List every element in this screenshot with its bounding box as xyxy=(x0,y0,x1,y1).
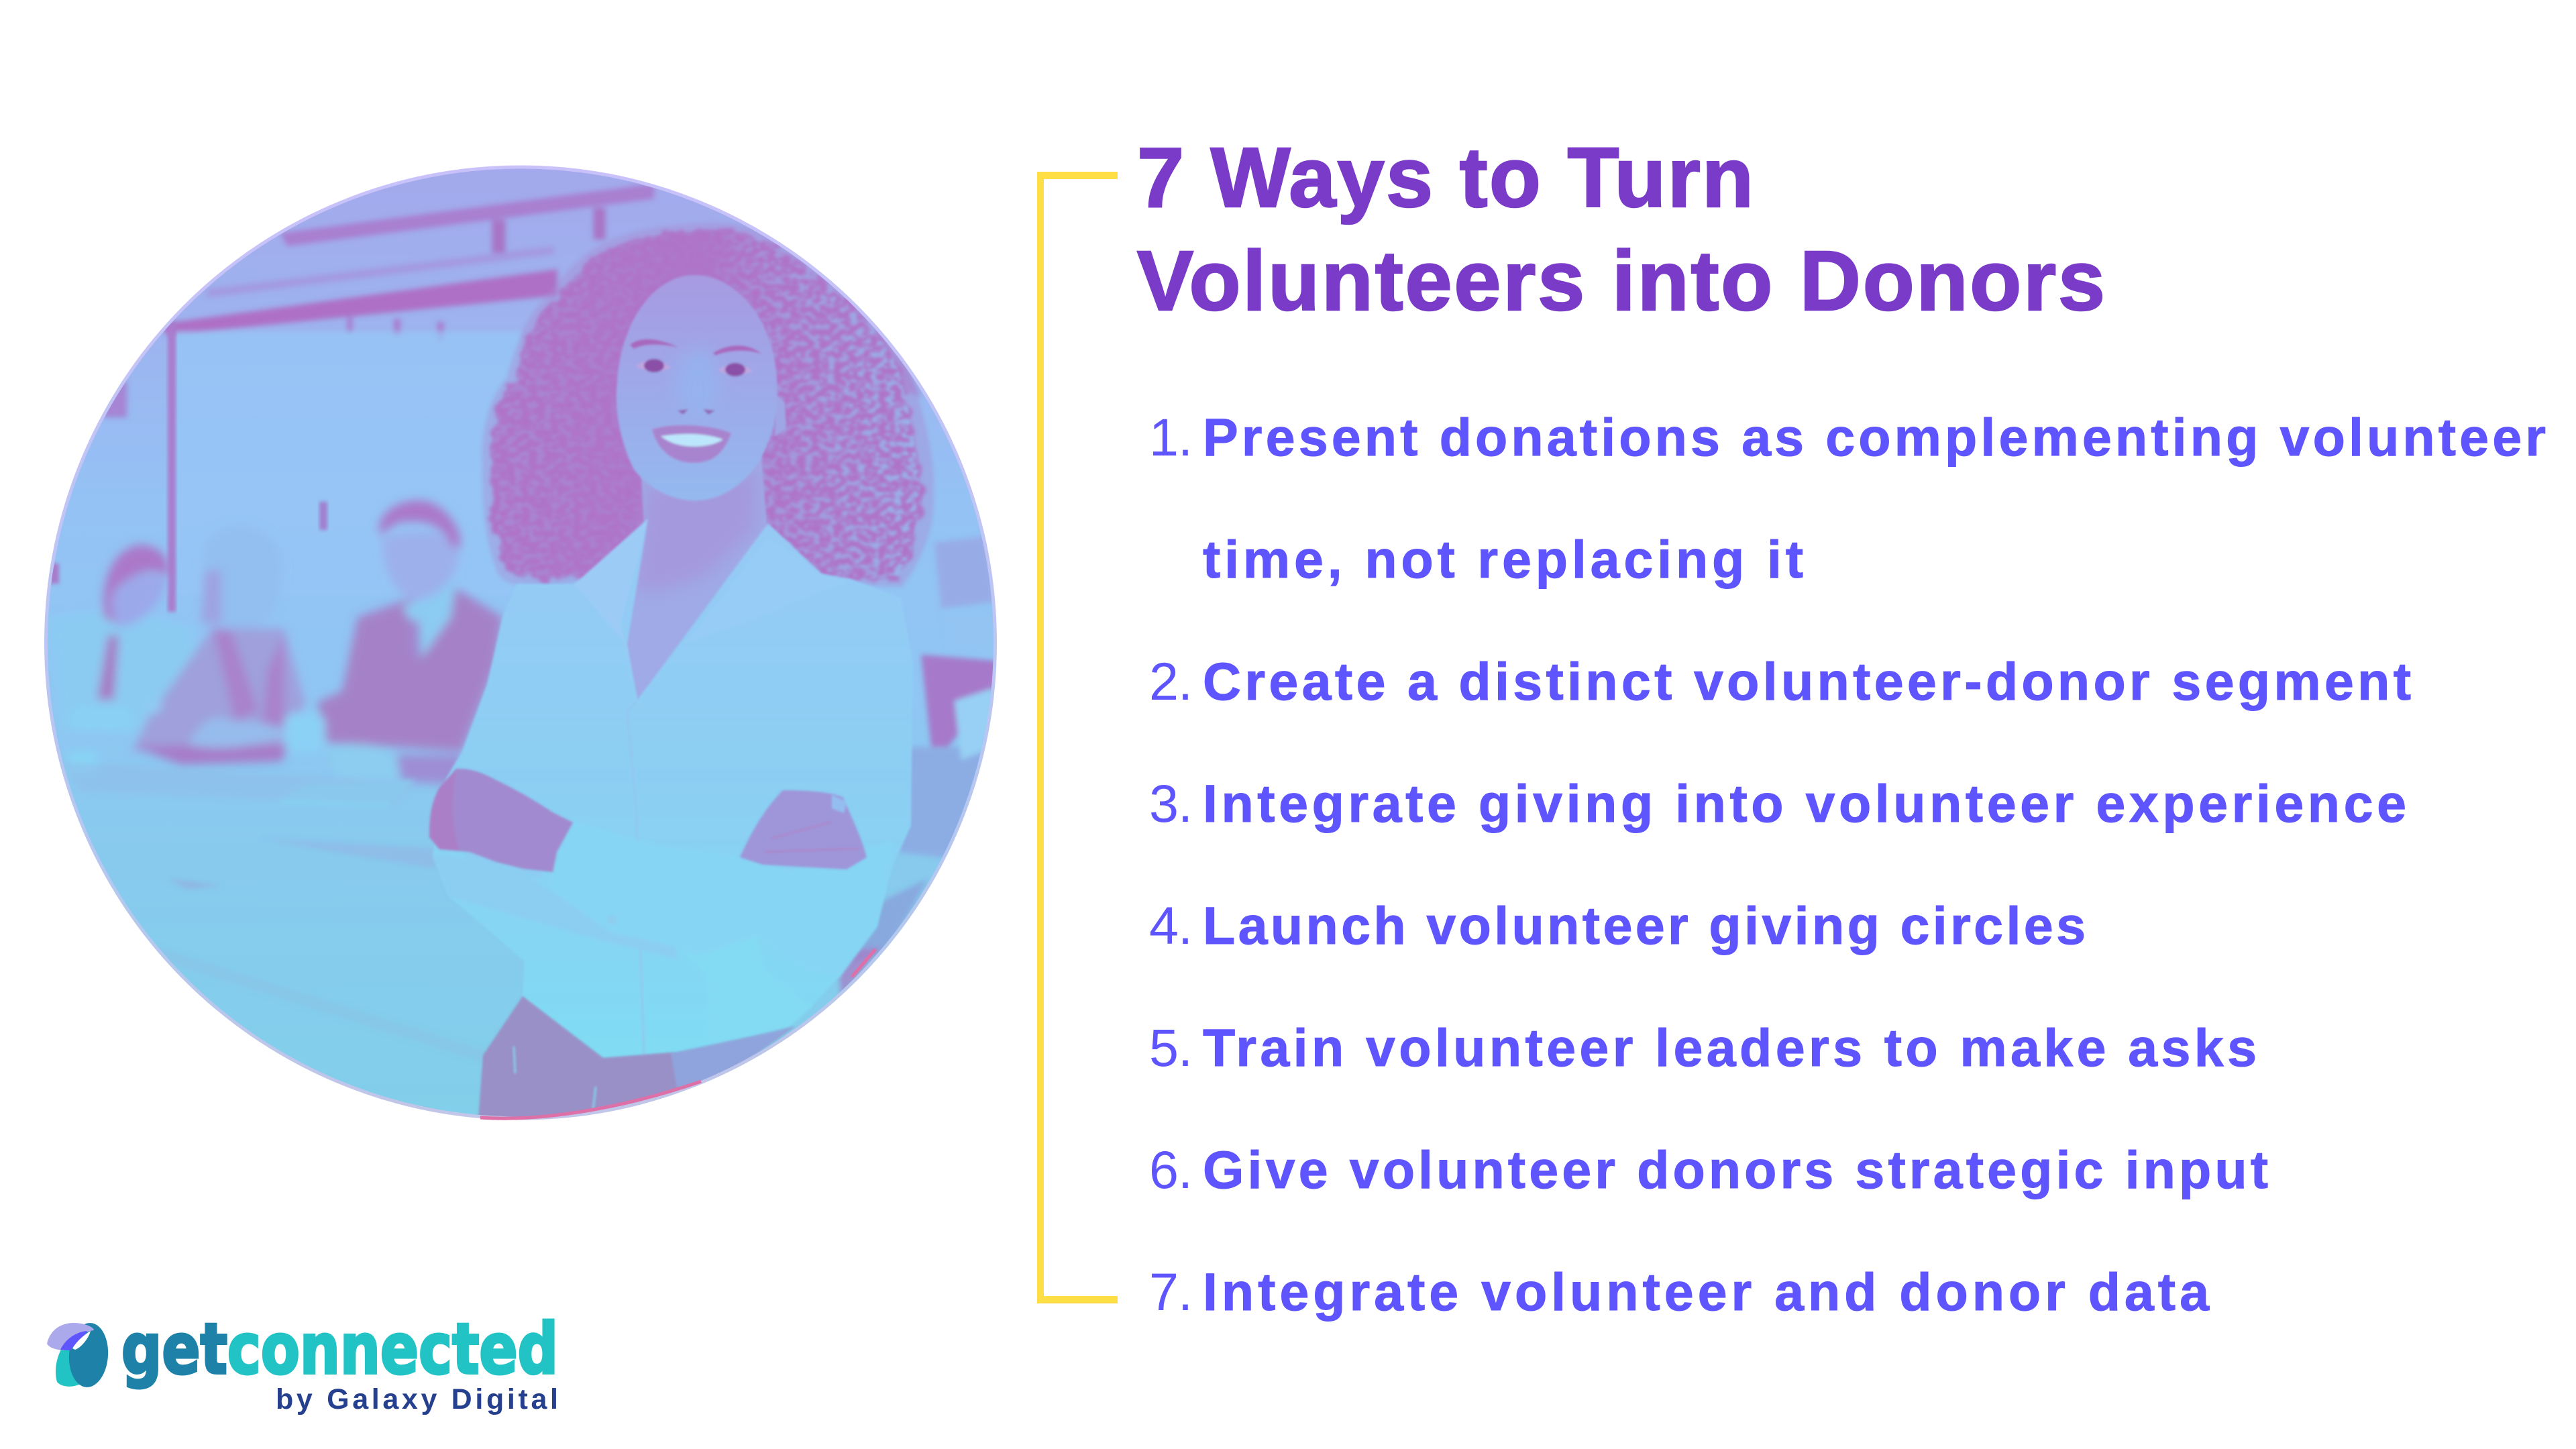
column xyxy=(168,322,176,612)
face xyxy=(616,275,786,500)
list item 6: 6. xyxy=(1149,1140,1193,1199)
logo icon xyxy=(47,1322,110,1389)
list item 3: Integrate giving into volunteer experience xyxy=(1203,773,2406,833)
list item 4: 4. xyxy=(1149,896,1193,955)
pants xyxy=(478,996,795,1127)
list item 3: 3. xyxy=(1149,773,1193,833)
list item 1: 1. xyxy=(1149,407,1193,467)
circle rim xyxy=(46,167,996,1118)
room background xyxy=(103,184,1002,997)
rim pink accent xyxy=(480,949,875,1118)
table items xyxy=(284,712,325,753)
list item 7: 7. xyxy=(1149,1262,1193,1322)
woman 2 xyxy=(212,564,272,596)
list item 2: 2. xyxy=(1149,651,1193,711)
numbered list xyxy=(1149,407,2546,1322)
list item 5: 5. xyxy=(1149,1018,1193,1077)
crossed arms xyxy=(609,841,880,977)
list item 1 xyxy=(1149,407,2546,589)
list item 4: Launch volunteer giving circles xyxy=(1203,896,2086,955)
shirt xyxy=(433,519,913,1058)
bracket connector xyxy=(1037,172,1118,1303)
list item 5: Train volunteer leaders to make asks xyxy=(1203,1018,2257,1077)
logo wordmark: getconnected xyxy=(121,1308,558,1390)
man 3 xyxy=(317,588,502,751)
title xyxy=(1137,130,2105,328)
man 1 xyxy=(94,610,150,698)
list item 1: Present donations as complementing volunteer xyxy=(1203,407,2546,467)
neck xyxy=(617,456,768,700)
logo: getconnected by Galaxy Digital xyxy=(47,1308,558,1415)
seated people xyxy=(47,500,502,785)
hands xyxy=(429,769,867,872)
list item 2: Create a distinct volunteer-donor segment xyxy=(1203,651,2411,711)
list item 7: Integrate volunteer and donor data xyxy=(1203,1262,2210,1322)
list item 1: time, not replacing it xyxy=(1203,529,1803,589)
title: Volunteers into Donors xyxy=(1137,233,2105,328)
logo tagline: by Galaxy Digital xyxy=(276,1383,558,1415)
photo: woman with crossed arms in a circular duotone crop xyxy=(40,161,1006,1127)
title: 7 Ways to Turn xyxy=(1137,130,1754,225)
hair xyxy=(482,222,934,587)
list item 6: Give volunteer donors strategic input xyxy=(1203,1140,2268,1199)
